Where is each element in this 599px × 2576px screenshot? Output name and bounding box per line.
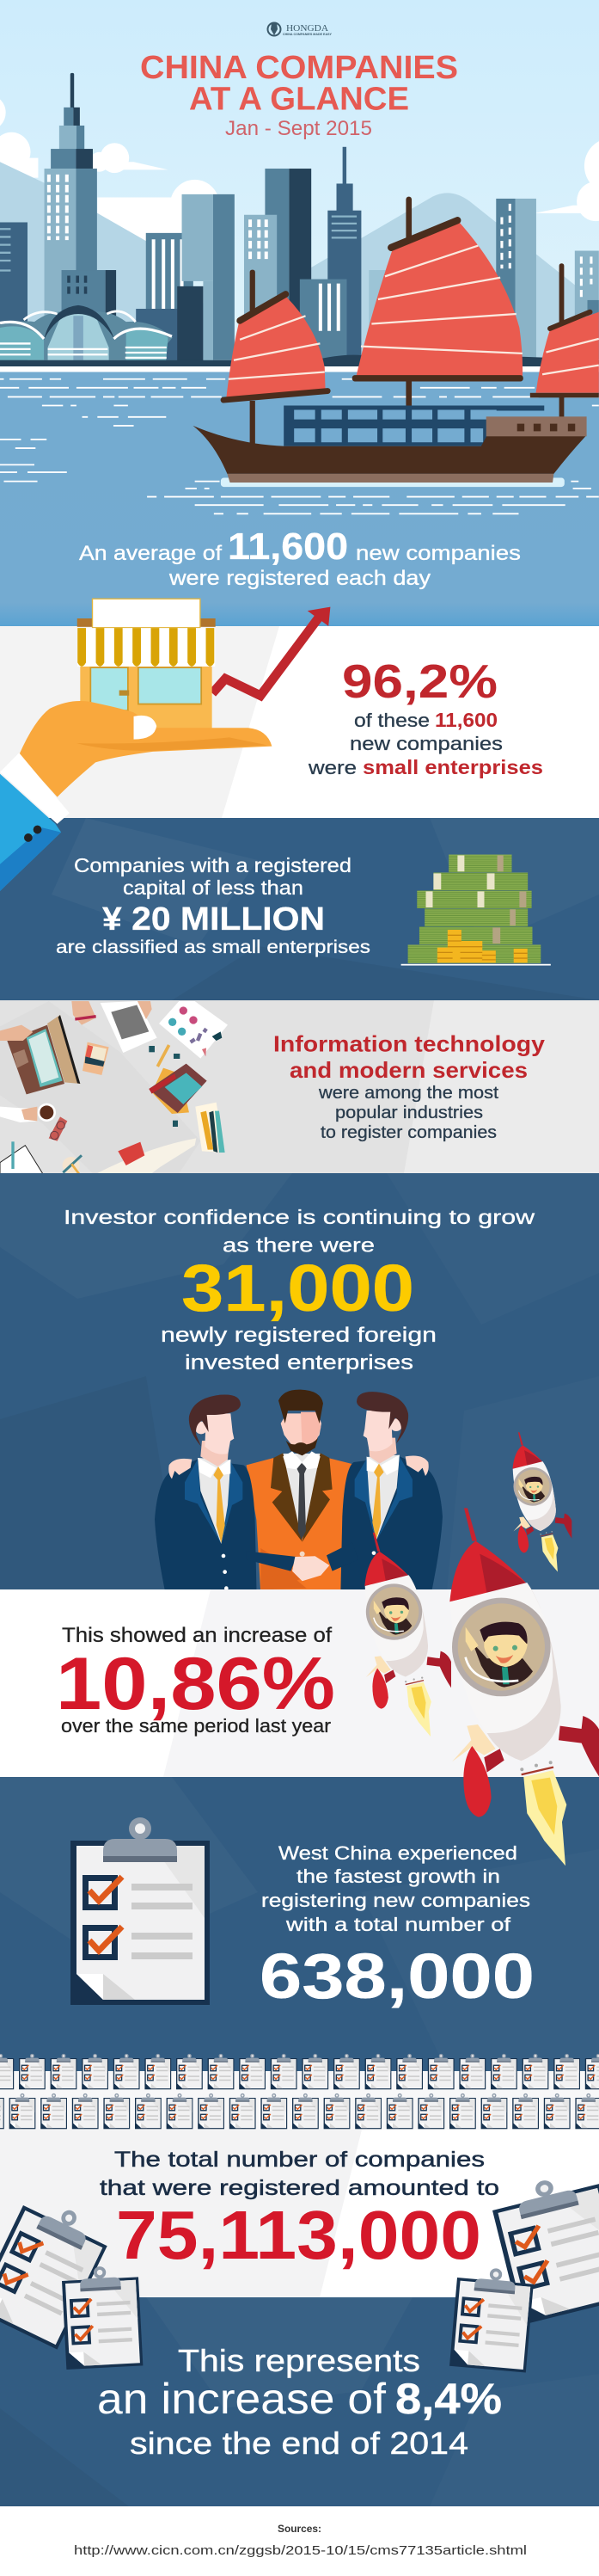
panel: investor confidence [0, 1173, 599, 1589]
illustration: hand holding shop with rising arrow [0, 599, 330, 891]
hand [19, 701, 272, 797]
document [101, 1001, 157, 1053]
stat: daily registrations: were registered each day [168, 567, 431, 590]
tower: tall dark tower [244, 169, 311, 360]
clipboard rows [0, 2054, 599, 2129]
text: industries: popular industries [335, 1104, 483, 1122]
text: industries: and modern services [290, 1057, 528, 1083]
text: 10,86% increase: 10,86% [56, 1643, 335, 1725]
text: west china: 638,000 [260, 1940, 535, 2012]
notebook and mug [0, 1141, 82, 1176]
text: increase since 2014: 8,4% [395, 2375, 502, 2423]
centre man [247, 1390, 357, 1594]
text: 10,86% increase: This showed an increase of [62, 1624, 332, 1647]
text: capital threshold: ¥ 20 MILLION [102, 901, 325, 938]
exhibition dome [0, 305, 173, 360]
left sail [226, 296, 326, 400]
text: capital threshold: capital of less than [123, 876, 303, 899]
arrow [212, 618, 319, 696]
tower: striped block [136, 233, 203, 363]
stat: 96,2%: 96,2% [342, 655, 498, 708]
coffee cup [0, 1104, 56, 1122]
books [149, 1064, 207, 1114]
laptop [0, 1015, 80, 1094]
stat: 96,2%: small enterprises [363, 756, 543, 778]
text: west china [260, 1842, 535, 2012]
handshake [256, 1548, 342, 1589]
shoreline [0, 355, 599, 372]
cuff and sleeve [0, 753, 70, 891]
main sail [356, 221, 523, 377]
binders [195, 1103, 225, 1153]
panel: capital threshold [0, 818, 599, 1000]
panel: sources [0, 2506, 599, 2576]
tower: antenna tower [300, 147, 361, 362]
panel: total companies [0, 2071, 599, 2297]
rocket: large [449, 1508, 599, 1866]
text: total companies: The total number of companies [114, 2148, 485, 2172]
title: CHINA COMPANIES [140, 50, 458, 86]
panel: increase since 2014 [0, 2297, 599, 2506]
panel: industries [0, 1000, 599, 1173]
keyboard and red mug [97, 1138, 196, 1176]
text: capital threshold: Companies with a registered [74, 854, 351, 876]
title: AT A GLANCE [189, 81, 409, 117]
text: west china: West China experienced [278, 1842, 517, 1864]
clipboard: right small [449, 2265, 535, 2373]
right man [340, 1392, 443, 1594]
text: 10,86% increase: over the same period last year [61, 1715, 331, 1737]
clipboard: left large [0, 2191, 114, 2350]
chart sheet [159, 1001, 228, 1059]
clipboard: right large [488, 2167, 599, 2325]
text: west china: with a total number of [285, 1914, 511, 1935]
hand with pen [71, 1001, 96, 1025]
tower: main skyscraper [45, 73, 116, 327]
text: capital threshold: are classified as small enterprises [56, 938, 370, 957]
stat: 96,2%: new companies [350, 733, 503, 754]
clipboard: left small [61, 2265, 143, 2370]
text: 10,86% increase [56, 1624, 335, 1737]
text: investor confidence: newly registered foreign [161, 1324, 437, 1347]
text: investor confidence: as there were [223, 1233, 375, 1256]
text: investor confidence: 31,000 [181, 1251, 414, 1325]
junk ship [193, 197, 599, 487]
rocket: medium [364, 1533, 451, 1737]
right sail [535, 312, 599, 393]
logo: CHINA COMPANIES MADE EASY [283, 33, 333, 36]
text: increase since 2014: since the end of 2014 [130, 2425, 468, 2461]
panel: small enterprises [0, 626, 599, 818]
text: investor confidence [64, 1206, 535, 1374]
title [140, 50, 458, 117]
row two [0, 2093, 599, 2129]
stat: 96,2%: were [308, 757, 357, 778]
stat: daily registrations: An average of [79, 542, 222, 565]
subtitle: Jan - Sept 2015 [225, 117, 372, 140]
towers: right side [369, 199, 599, 361]
mountains [0, 162, 214, 366]
text: increase since 2014 [97, 2343, 502, 2461]
text: total companies: that were registered amounted to [100, 2176, 499, 2200]
clouds [0, 95, 599, 253]
water ripples [0, 379, 599, 513]
text: capital threshold [56, 854, 370, 957]
stat: 96,2%: of these [354, 710, 430, 731]
text: investor confidence: invested enterprises [185, 1351, 413, 1374]
panel: hero harbour scene [0, 0, 599, 626]
panel: sources: http://www.cicn.com.cn/zggsb/2015-10/15/cms77135article.shtml [74, 2543, 527, 2558]
icon: big clipboard [70, 1817, 210, 2005]
text: total companies: 75,113,000 [116, 2197, 481, 2273]
rocket: small top right [512, 1432, 571, 1572]
text: industries: were among the most [318, 1084, 498, 1103]
row one [0, 2054, 599, 2089]
text: investor confidence: Investor confidence is continuing to grow [64, 1206, 535, 1228]
shop [77, 599, 216, 732]
panel: sources: Sources: [278, 2523, 321, 2535]
tablet [83, 1042, 109, 1075]
pencil and clips [149, 1045, 180, 1127]
text: total companies [100, 2148, 499, 2273]
railing [284, 405, 544, 446]
text: increase since 2014: an increase of [97, 2375, 386, 2423]
glasses [49, 1116, 67, 1141]
stat: daily registrations: 11,600 [228, 526, 348, 568]
text: increase since 2014: This represents [178, 2343, 420, 2378]
stat: 96,2% [308, 655, 543, 778]
tower: light block [182, 194, 235, 360]
text: industries [273, 1030, 546, 1142]
logo [268, 22, 333, 36]
left man [155, 1394, 257, 1597]
stat: daily registrations: new companies [356, 542, 521, 565]
logo: HONGDA [286, 24, 328, 34]
stat: 96,2%: 11,600 [435, 709, 498, 731]
panel: increase [0, 1589, 599, 1777]
tower: left edge [0, 222, 28, 365]
hull [193, 426, 586, 474]
text: industries: to register companies [321, 1123, 497, 1142]
panel: west china [0, 1777, 599, 2071]
illustration: three businessmen shaking hands [155, 1390, 443, 1597]
stat: daily registrations [79, 526, 521, 590]
illustration: top-down desk with laptop and papers [0, 1001, 228, 1176]
illustration: stacks of cash and coins [401, 855, 551, 966]
text: west china: the fastest growth in [296, 1866, 500, 1887]
text: west china: registering new companies [261, 1890, 530, 1911]
text: industries: Information technology [273, 1030, 546, 1056]
